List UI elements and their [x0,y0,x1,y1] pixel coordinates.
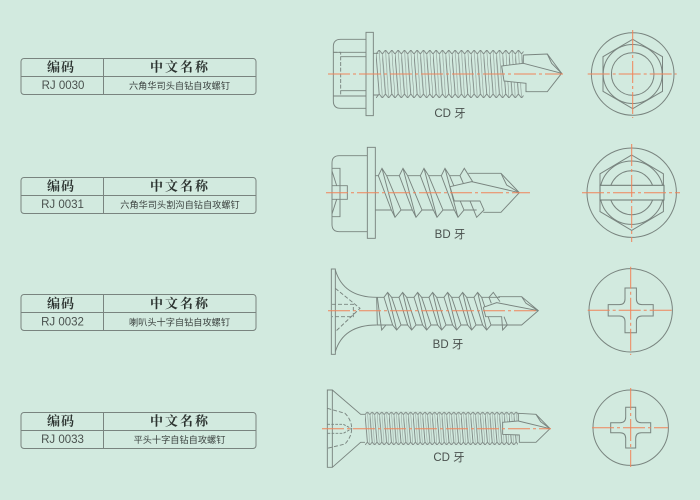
table: RJ 0033: 平头十字自钻自攻螺钉 [134,434,225,445]
table: RJ 0030: 中文名称 [150,60,210,74]
table: RJ 0032 [21,294,256,330]
table: RJ 0031: RJ 0031 [41,199,84,211]
table: RJ 0032: 中文名称 [150,296,210,311]
screw side view: RJ 0033 CD thread [322,390,551,467]
table: RJ 0030 [21,58,256,94]
table: RJ 0032: 编码 [47,296,75,311]
table: RJ 0031: 编码 [47,178,75,194]
table: RJ 0030: 六角华司头自钻自攻螺钉 [129,80,230,91]
table: RJ 0033: 中文名称 [150,414,210,428]
table: RJ 0032: 喇叭头十字自钻自攻螺钉 [129,316,230,328]
thread label: CD: CD 牙 [434,108,466,120]
thread label: BD: BD 牙 [435,229,465,241]
table: RJ 0031: 中文名称 [150,178,210,194]
table: RJ 0030: RJ 0030 [42,80,84,92]
table: RJ 0033: 编码 [47,414,75,428]
screw side view: RJ 0030 CD thread [328,32,563,116]
table: RJ 0031 [21,178,256,214]
table: RJ 0033: RJ 0033 [41,434,84,446]
table: RJ 0033 [21,412,256,448]
thread label: CD: CD 牙 [433,452,465,464]
screw end view: RJ 0030 [588,30,677,118]
screw end view: RJ 0033 [592,388,668,467]
screw side view: RJ 0032 BD thread [328,269,539,354]
table: RJ 0031: 六角华司头割沟自钻自攻螺钉 [120,199,240,210]
table: RJ 0030: 编码 [47,60,75,74]
screw side view: RJ 0031 BD thread [326,147,530,238]
screw end view: RJ 0031 [582,144,680,242]
screw end view: RJ 0032 [588,267,673,355]
thread label: BD: BD 牙 [433,339,463,351]
table: RJ 0032: RJ 0032 [41,316,84,328]
